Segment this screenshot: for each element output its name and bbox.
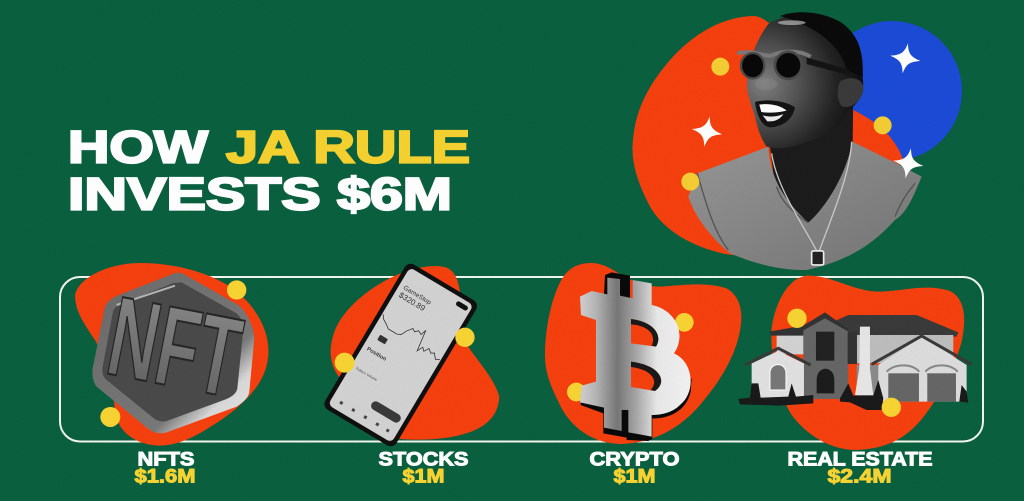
label: real estate: $2.4M: [828, 466, 892, 488]
garage wing: [878, 337, 967, 402]
yellow dot: [711, 58, 729, 76]
label: stocks: $1M: [402, 466, 444, 488]
camera: [455, 300, 469, 311]
side window: [848, 332, 857, 364]
trade button: [369, 400, 402, 424]
mouth: [755, 100, 795, 127]
blue circle blob: [822, 21, 962, 161]
yellow dot: [100, 407, 120, 427]
pendant: [812, 251, 824, 265]
stock name: GameStop: [402, 285, 432, 307]
chimney: [855, 327, 873, 395]
panel: stocks illustration: [331, 266, 499, 440]
label: crypto: [590, 450, 680, 488]
red blob: [545, 263, 741, 444]
label: real estate: REAL ESTATE: [788, 450, 932, 470]
head: [747, 14, 863, 148]
yellow dot: [681, 173, 699, 191]
brick tower: [803, 318, 848, 399]
yellow dot: [882, 398, 901, 417]
front door: [817, 369, 834, 393]
nav bar: [339, 401, 390, 433]
bitcoin symbol: [580, 272, 692, 441]
panel: real estate illustration: [738, 276, 972, 450]
garage door right: [927, 373, 956, 402]
phone: [322, 261, 480, 449]
coin highlight: [117, 286, 175, 305]
label: NFTs: NFTS: [138, 450, 194, 470]
nose: [755, 78, 777, 90]
red blob: [632, 16, 903, 260]
range selector: [377, 335, 388, 344]
left wing: [752, 351, 804, 399]
upper wall right: [848, 335, 953, 363]
label: real estate: [788, 450, 932, 488]
stock price: $320.89: [397, 291, 427, 313]
label: NFTs: [134, 450, 196, 488]
NFT coin: [92, 273, 254, 433]
forehead highlight: [778, 20, 806, 25]
left roof: [769, 312, 848, 336]
title: HOW: [68, 122, 209, 172]
price chart: [376, 307, 449, 363]
arched window: [770, 365, 786, 390]
label: NFTs: $1.6M: [134, 466, 196, 488]
panel: NFTs illustration: [75, 263, 268, 446]
red blob: [331, 266, 499, 440]
stock dots: [335, 328, 475, 373]
shirt folds: [697, 173, 915, 250]
title: JA RULE: [226, 122, 470, 172]
garage roof: [872, 336, 972, 364]
yellow dot: [567, 383, 586, 401]
ear: [838, 78, 863, 107]
upper wall left: [777, 334, 805, 354]
shirt: [688, 142, 922, 270]
sunglasses: [737, 52, 850, 79]
neck: [768, 97, 853, 227]
tower window: [816, 332, 834, 361]
sparkle on blue: [888, 41, 923, 76]
yellow dot: [227, 280, 246, 300]
left wing roof: [745, 348, 811, 365]
label: crypto: $1M: [614, 466, 656, 488]
NFT letters: NFT: [99, 273, 250, 422]
title: [68, 122, 470, 220]
position label: Position: [366, 346, 388, 363]
yellow dot: [874, 116, 892, 134]
portrait: Ja Rule with blobs: [632, 12, 962, 270]
garage door left: [888, 373, 919, 402]
main roof: [835, 315, 958, 337]
garage arches: [887, 365, 958, 372]
shrubs: [738, 380, 968, 410]
centre wall: [857, 365, 880, 398]
yellow dot: [787, 309, 807, 328]
sparkle on red: [689, 114, 725, 149]
red blob: [771, 276, 964, 450]
sparkle on shoulder: [891, 146, 926, 181]
necklace: [772, 142, 852, 251]
label: stocks: [378, 450, 468, 488]
label: crypto: CRYPTO: [590, 450, 680, 470]
yellow dot: [675, 313, 694, 332]
red blob: [75, 263, 268, 446]
rounded frame: [60, 277, 983, 442]
hair: [780, 12, 863, 77]
inner hole shading: [631, 319, 661, 391]
stats: Today's Volume: [355, 366, 378, 382]
title: INVESTS $6M: [68, 168, 452, 220]
panel: crypto illustration: [545, 263, 741, 444]
house: [738, 312, 972, 410]
label: stocks: STOCKS: [378, 450, 468, 470]
